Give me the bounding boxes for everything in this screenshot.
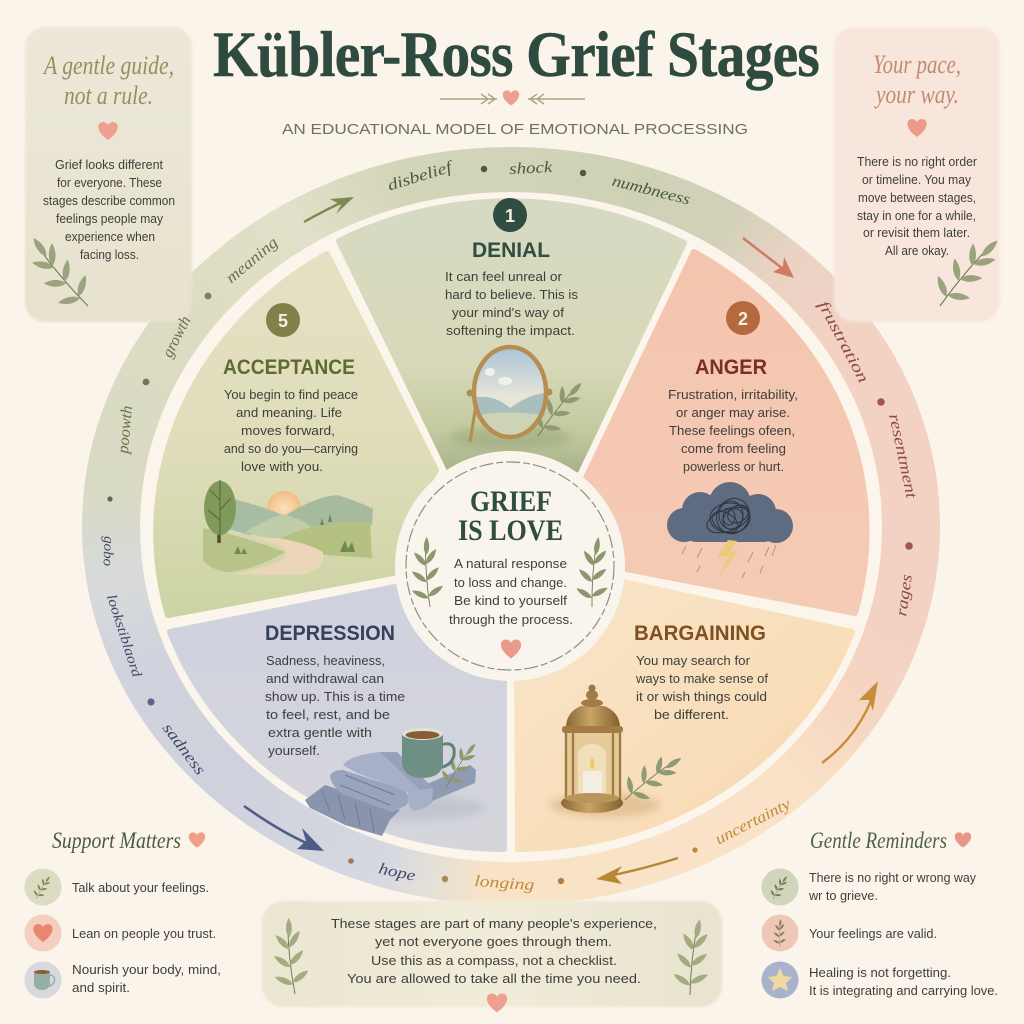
note text bbox=[331, 917, 657, 986]
icon: laurel right bbox=[574, 536, 613, 608]
icon: mirror bbox=[450, 347, 593, 450]
ring labels: shock bbox=[509, 159, 554, 178]
card text: There is no right order bbox=[857, 155, 977, 169]
centre text: Be kind to yourself bbox=[454, 594, 568, 608]
heading: DENIAL bbox=[472, 239, 550, 262]
card text: facing loss. bbox=[80, 248, 139, 262]
description: hard to believe. This is bbox=[445, 288, 578, 302]
card heading: not a rule. bbox=[64, 81, 153, 110]
gentle reminders heading: Gentle Reminders bbox=[810, 828, 947, 853]
card heading bbox=[42, 51, 174, 110]
title divider with heart bbox=[440, 90, 585, 106]
icon: right sprig bbox=[670, 917, 715, 997]
reminder: healing: Healing is not forgetting. bbox=[809, 966, 951, 980]
icon: heart bbox=[907, 119, 927, 137]
description: You begin to find peace bbox=[224, 388, 358, 402]
ring labels: gobo bbox=[99, 536, 116, 566]
card text: All are okay. bbox=[885, 244, 949, 258]
badge 1 bbox=[493, 198, 527, 232]
panel: acceptance bbox=[156, 254, 436, 615]
centre text: A natural response bbox=[454, 557, 567, 571]
heading: DEPRESSION bbox=[265, 622, 395, 645]
description: These feelings ofeen, bbox=[669, 424, 795, 438]
panel: gentle guide card bbox=[14, 27, 192, 322]
reminder: healing bbox=[762, 962, 998, 998]
ring labels: lookstiblaord bbox=[103, 593, 144, 680]
icon: sprig bbox=[923, 224, 1011, 319]
panel: denial bbox=[339, 198, 684, 470]
description: You may search for bbox=[636, 654, 750, 668]
centre text: through the process. bbox=[449, 613, 573, 627]
description: softening the impact. bbox=[446, 324, 575, 338]
icon: blanket and mug bbox=[305, 728, 485, 836]
description: be different. bbox=[654, 708, 729, 722]
panel: anger bbox=[585, 252, 867, 613]
support matters heading: Support Matters bbox=[52, 828, 181, 853]
description: Sadness, heaviness, bbox=[266, 654, 385, 668]
description: or anger may arise. bbox=[676, 406, 790, 420]
ring dots bbox=[107, 166, 913, 884]
support item: lean: Lean on people you trust. bbox=[72, 927, 216, 941]
card heading bbox=[873, 50, 961, 109]
support item: nourish bbox=[24, 962, 221, 998]
ring labels: disbelief bbox=[386, 158, 457, 194]
card text bbox=[43, 158, 175, 262]
support item: nourish: Nourish your body, mind, bbox=[72, 963, 221, 977]
description: yourself. bbox=[268, 744, 320, 758]
note text: yet not everyone goes through them. bbox=[375, 935, 612, 949]
badge 5: 5 bbox=[278, 311, 288, 331]
ring labels: hope bbox=[377, 860, 417, 885]
ring labels: frustration bbox=[814, 298, 872, 386]
icon: heart bbox=[98, 122, 118, 140]
centre heading bbox=[458, 485, 563, 547]
feelings ring bbox=[82, 147, 940, 905]
panel: bottom note bbox=[262, 901, 722, 1012]
icon: sprig bbox=[14, 226, 103, 320]
badge 1: 1 bbox=[505, 206, 515, 226]
support item: nourish: and spirit. bbox=[72, 981, 130, 995]
card text: stay in one for a while, bbox=[857, 209, 976, 223]
reminder: no right or wrong bbox=[762, 868, 977, 906]
heading: ACCEPTANCE bbox=[223, 356, 355, 379]
arrow: depression bbox=[244, 806, 324, 851]
note text: Use this as a compass, not a checklist. bbox=[371, 954, 617, 968]
panel: depression bbox=[170, 582, 504, 849]
arrow: denial to anger bbox=[743, 238, 794, 278]
centre heading: IS LOVE bbox=[458, 514, 563, 547]
icon: left sprig bbox=[267, 916, 312, 996]
description: Frustration, irritability, bbox=[668, 388, 798, 402]
arrow: bargaining to hope bbox=[596, 858, 678, 884]
description: moves forward, bbox=[241, 424, 335, 438]
arrow: anger to bargaining bbox=[822, 681, 878, 763]
card text bbox=[857, 155, 977, 258]
subtitle: AN EDUCATIONAL MODEL OF EMOTIONAL PROCESSING bbox=[282, 121, 748, 138]
card text: experience when bbox=[65, 230, 155, 244]
reminder: healing: It is integrating and carrying love. bbox=[809, 984, 998, 998]
card text: Grief looks different bbox=[55, 158, 163, 172]
card text: or timeline. You may bbox=[862, 173, 972, 187]
icon: storm cloud bbox=[667, 482, 793, 578]
card text: move between stages, bbox=[858, 191, 976, 205]
badge 2: 2 bbox=[738, 309, 748, 329]
description: and meaning. Life bbox=[236, 406, 342, 420]
reminder: no right or wrong: There is no right or wrong way bbox=[809, 871, 977, 885]
description bbox=[224, 388, 358, 474]
description: your mind's way of bbox=[452, 306, 565, 320]
card heading: your way. bbox=[874, 80, 959, 109]
icon: centre heart bbox=[501, 640, 521, 658]
description: extra gentle with bbox=[268, 726, 372, 740]
centre text bbox=[449, 557, 573, 627]
ring labels: sadness bbox=[159, 720, 208, 778]
panel: your pace card bbox=[834, 27, 1011, 322]
support item: talk bbox=[24, 868, 209, 906]
card text: stages describe common bbox=[43, 194, 175, 208]
card heading: Your pace, bbox=[873, 50, 961, 79]
description: come from feeling bbox=[681, 442, 786, 456]
panel: bargaining bbox=[517, 577, 852, 849]
ring labels: numbneess bbox=[610, 173, 692, 209]
centre text: to loss and change. bbox=[454, 576, 567, 590]
card text: for everyone. These bbox=[57, 176, 162, 190]
description: powerless or hurt. bbox=[683, 460, 784, 474]
description: it or wish things could bbox=[636, 690, 767, 704]
icon: lantern bbox=[550, 684, 690, 817]
heading: ANGER bbox=[695, 356, 767, 379]
reminder: no right or wrong: wr to grieve. bbox=[808, 889, 878, 903]
ring labels bbox=[99, 158, 920, 894]
arrow: acceptance to denial bbox=[304, 197, 354, 222]
heading: BARGAINING bbox=[634, 622, 766, 645]
description: love with you. bbox=[241, 460, 323, 474]
badge 2 bbox=[726, 301, 760, 335]
description: show up. This is a time bbox=[265, 690, 405, 704]
ring labels: longing bbox=[474, 873, 535, 894]
note text: You are allowed to take all the time you need. bbox=[347, 972, 641, 986]
description bbox=[445, 270, 578, 338]
card text: feelings people may bbox=[56, 212, 164, 226]
ring inner gap bbox=[140, 192, 882, 862]
card heading: A gentle guide, bbox=[42, 51, 174, 80]
ring labels: rages bbox=[893, 573, 916, 617]
card text: or revisit them later. bbox=[863, 226, 970, 240]
note text: These stages are part of many people's experience, bbox=[331, 917, 657, 931]
reminder: feelings valid: Your feelings are valid. bbox=[809, 927, 937, 941]
description: ways to make sense of bbox=[635, 672, 769, 686]
centre heading: GRIEF bbox=[470, 485, 552, 518]
description: and so do you—carrying bbox=[224, 442, 358, 456]
description bbox=[668, 388, 798, 474]
description bbox=[265, 654, 405, 758]
description: and withdrawal can bbox=[266, 672, 384, 686]
ring labels: resentment bbox=[885, 412, 920, 501]
badge 5 bbox=[266, 303, 300, 337]
reminder: feelings valid bbox=[762, 914, 937, 952]
support item: lean bbox=[24, 914, 216, 952]
ring labels: uncertainty bbox=[713, 795, 794, 848]
ring labels: growth bbox=[159, 313, 195, 360]
description: It can feel unreal or bbox=[445, 270, 562, 284]
ring labels: poowth bbox=[115, 405, 136, 455]
description: to feel, rest, and be bbox=[266, 708, 390, 722]
icon: note heart bbox=[487, 994, 507, 1012]
centre circle: grief is love bbox=[395, 451, 625, 681]
description bbox=[635, 654, 769, 722]
icon: landscape bbox=[203, 480, 373, 575]
title: Kübler-Ross Grief Stages bbox=[213, 19, 819, 91]
icon: laurel left bbox=[407, 536, 446, 608]
ring labels: meaning bbox=[223, 234, 281, 287]
support item: talk: Talk about your feelings. bbox=[72, 881, 209, 895]
